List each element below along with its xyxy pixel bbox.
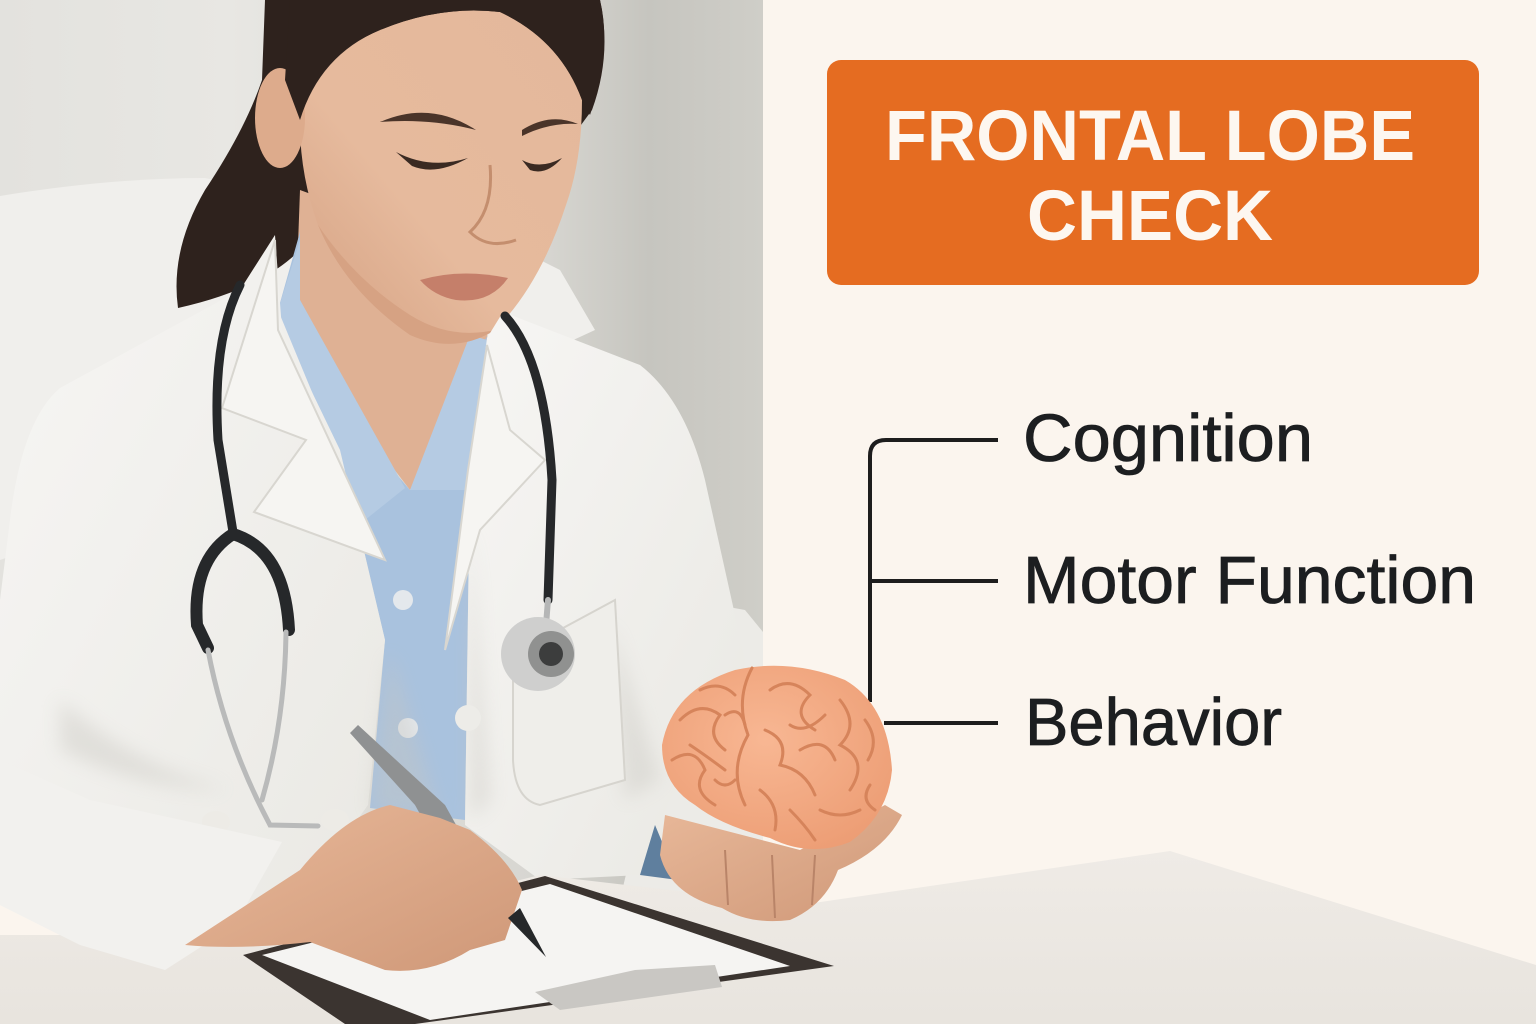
ear tips xyxy=(202,809,349,833)
clipboard xyxy=(243,876,834,1024)
shirt collar shade xyxy=(278,240,487,520)
coat lapels xyxy=(222,240,385,560)
hair top xyxy=(285,0,604,120)
stethoscope xyxy=(196,285,552,826)
pen shaft xyxy=(350,725,470,850)
table xyxy=(0,851,1536,1024)
shirt buttons xyxy=(393,590,418,738)
title text: CHECK xyxy=(1027,177,1273,256)
label: Behavior: Behavior xyxy=(1025,685,1282,760)
lower wall right of coat xyxy=(620,600,763,900)
exam bed pillow xyxy=(0,178,595,560)
ponytail and hair back xyxy=(177,0,604,308)
nose xyxy=(470,165,516,244)
ear xyxy=(255,68,305,168)
stethoscope chest piece xyxy=(501,617,575,691)
eyebrows xyxy=(380,113,578,136)
finger lines xyxy=(725,850,815,918)
writing hand xyxy=(185,805,522,971)
lab coat left body xyxy=(0,235,385,970)
label: Motor Function: Motor Function xyxy=(1023,543,1476,618)
writing sleeve xyxy=(0,760,282,970)
coat shadows xyxy=(60,520,660,820)
bracket connector lines xyxy=(870,440,998,723)
title text xyxy=(885,97,1415,256)
neck xyxy=(296,190,490,490)
holding hand xyxy=(660,805,902,921)
brain xyxy=(662,666,892,849)
label: Cognition: Cognition xyxy=(1023,401,1313,476)
coat button xyxy=(455,705,481,731)
brain folds xyxy=(672,668,875,840)
blue shirt collar and body xyxy=(278,232,487,820)
face xyxy=(300,10,582,344)
coat pocket xyxy=(513,600,625,805)
lab coat right body xyxy=(465,312,745,880)
title banner xyxy=(827,60,1479,285)
lips xyxy=(420,273,508,301)
title text: FRONTAL LOBE xyxy=(885,97,1415,176)
eyes xyxy=(396,152,562,172)
jaw shadow xyxy=(318,225,495,344)
pen tip xyxy=(508,908,546,957)
clinic wall background xyxy=(0,0,763,900)
shirt cuff xyxy=(640,825,678,880)
icon: brain model held in hand xyxy=(640,666,902,921)
